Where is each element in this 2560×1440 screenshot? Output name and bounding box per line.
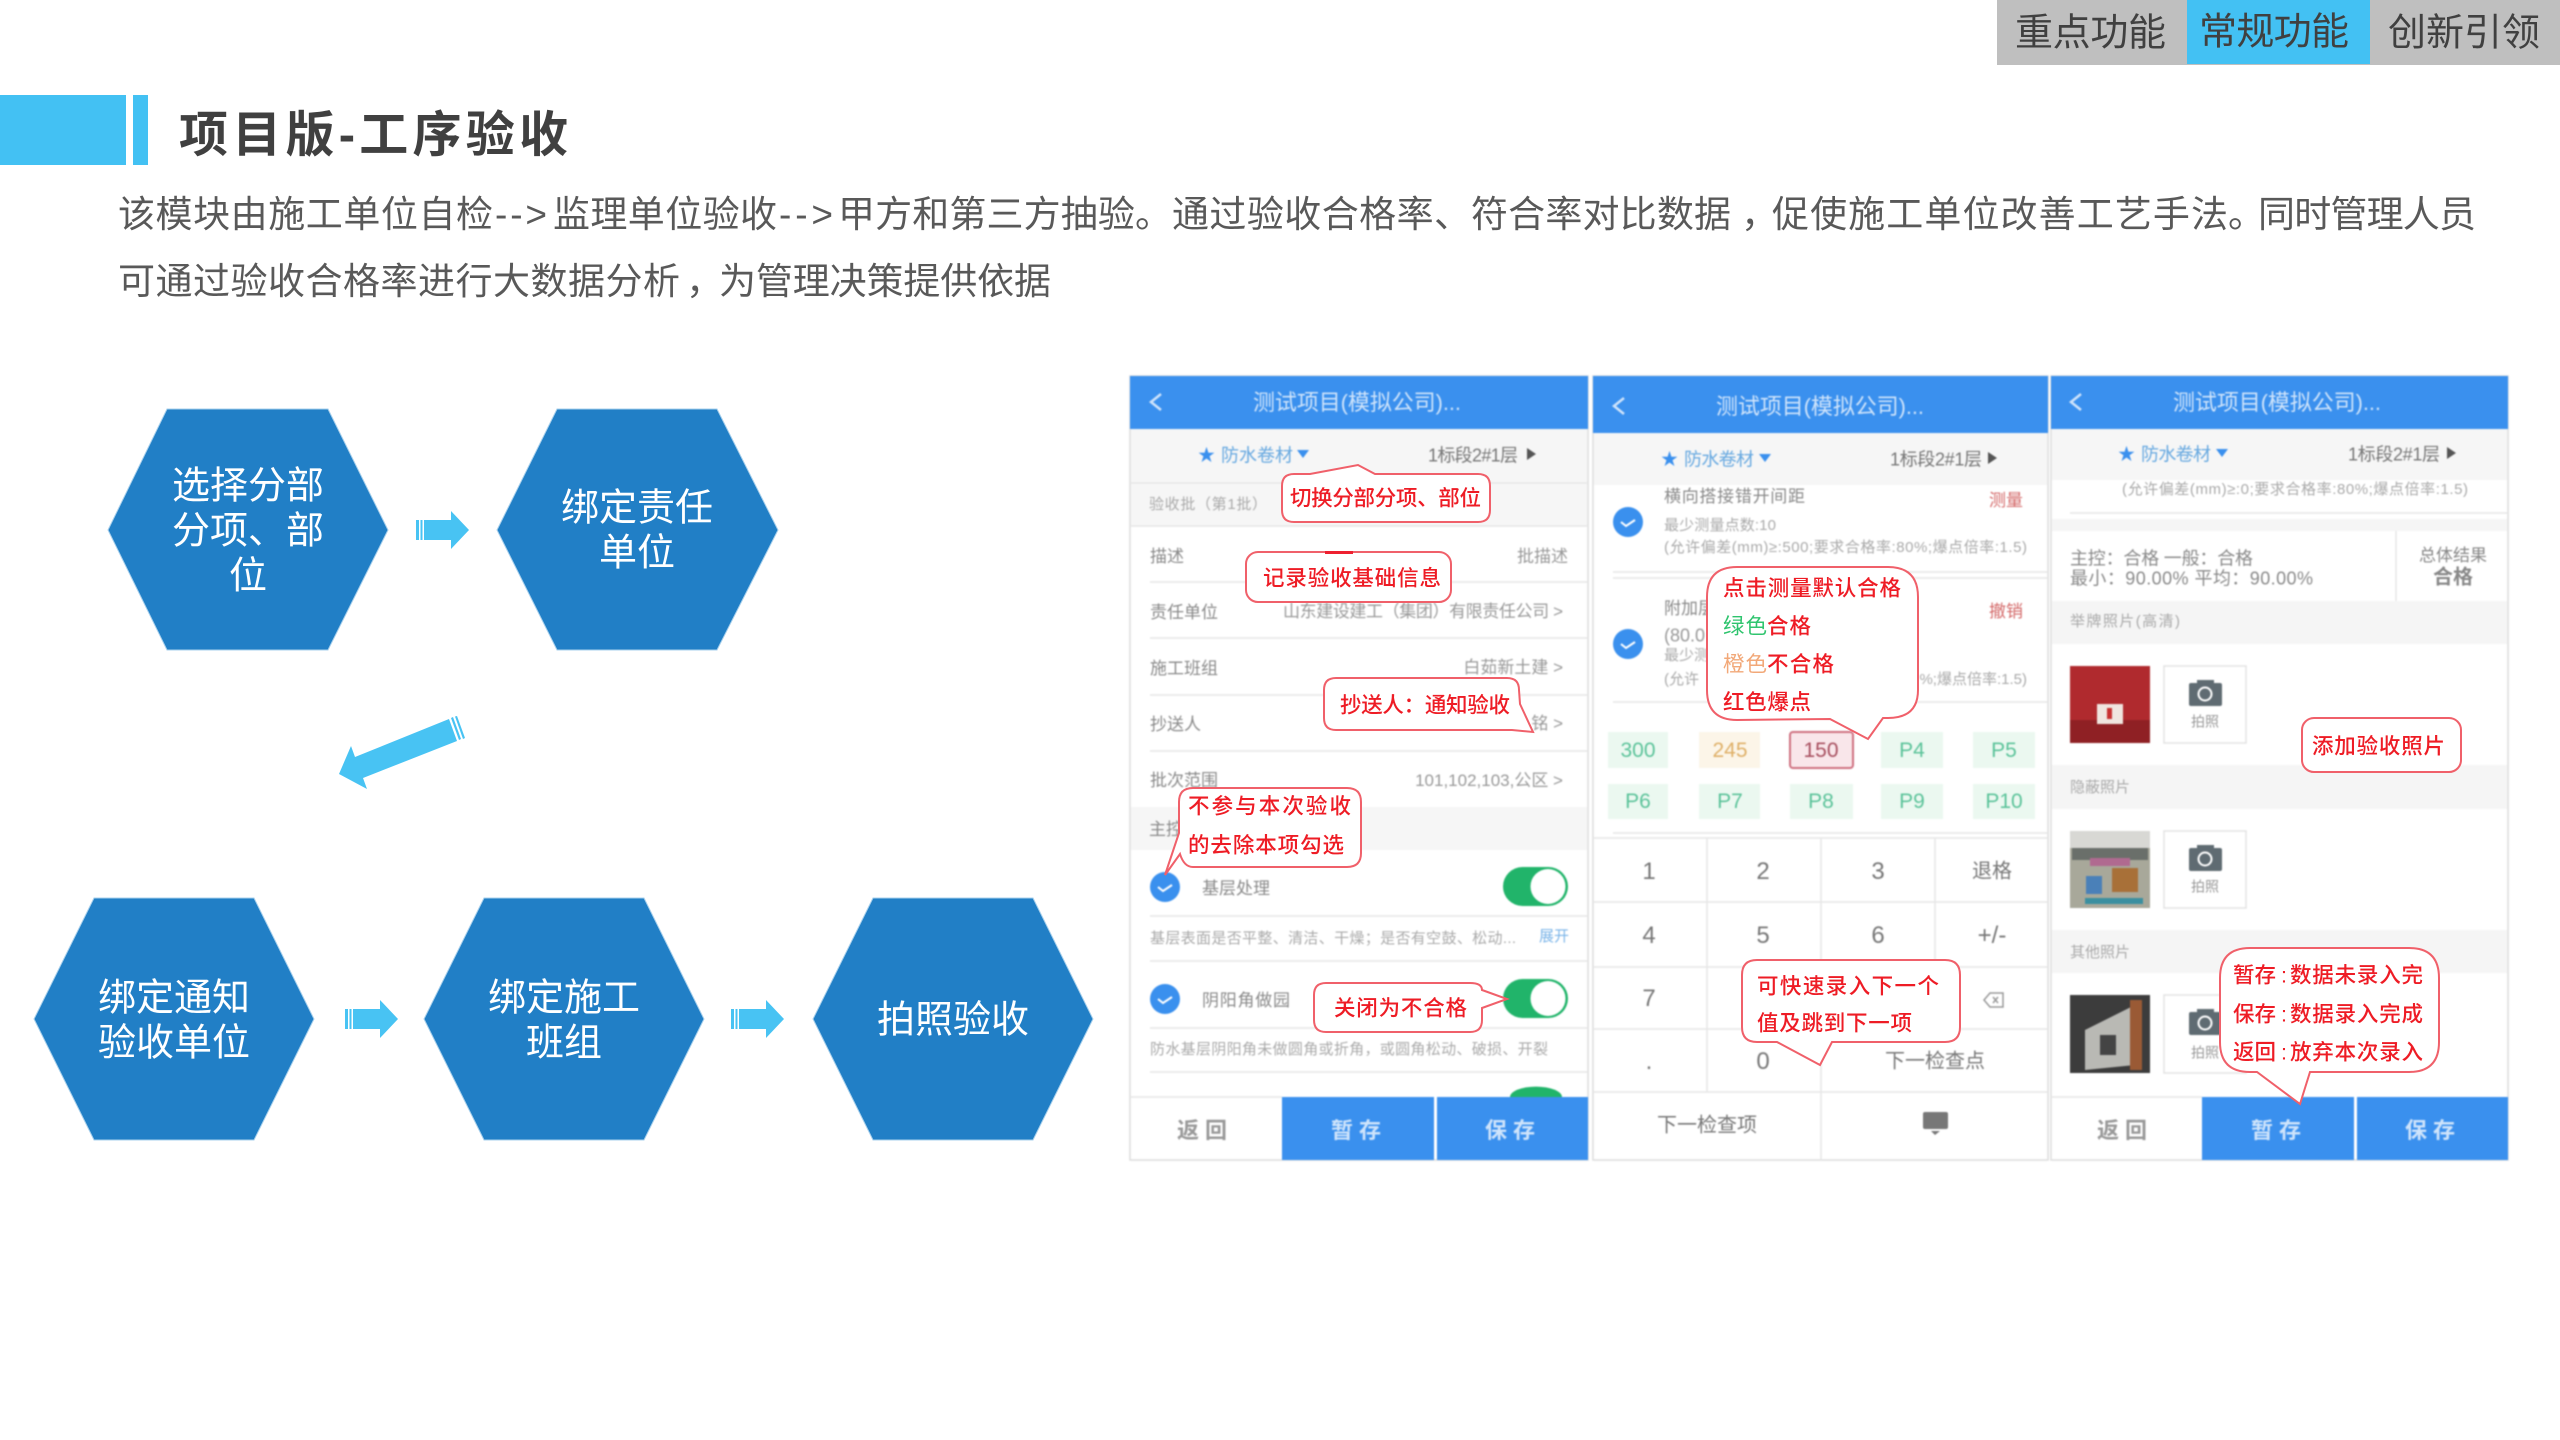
hexagon: step 5	[813, 898, 1093, 1140]
description text: 符合率对比数据	[1471, 194, 1731, 235]
callout: basic info: 记录验收基础信息	[1263, 566, 1441, 590]
callout: toggle off means fail	[1314, 983, 1507, 1032]
arrow: step 3 to 4	[345, 1000, 398, 1038]
description text: -->	[495, 194, 547, 235]
phone screen 1: inspection form: 测试项目(模拟公司)...	[1253, 390, 1461, 415]
phone screen 2: measurement input: (80.0	[1664, 626, 1705, 646]
description text: -->	[779, 194, 833, 235]
hexagon: step 4: 绑定施工	[488, 978, 640, 1020]
phone screen 2: measurement input: 最少测量点数:10	[1664, 517, 1776, 534]
phone screen 2: measurement input: (允许偏差(mm)≥:500;要求合格率:80%;爆点倍率:1.5)	[1664, 539, 2027, 556]
description text: ，	[1741, 194, 1778, 235]
phone screen 3: photos: 合格	[2433, 566, 2473, 588]
phone screen 2: measurement input: 附加层	[1664, 599, 1715, 618]
phone screen 1: inspection form: 山东建设建工（集团）有限责任公司 >	[1283, 602, 1563, 621]
description text: 可通过验收合格率进行大数据分析	[118, 261, 680, 302]
phone screen 2: measurement input: 撤销	[1989, 602, 2023, 621]
phone screen 1: inspection form: 批次范围	[1150, 771, 1218, 790]
phone screen 2: measurement input: 3	[1871, 858, 1885, 885]
callout: add photos	[2302, 718, 2461, 772]
hexagon: step 5: 拍照验收	[877, 1000, 1029, 1042]
phone screen 1: inspection form: 1标段2#1层	[1428, 446, 1518, 466]
phone screen 3: photos: 主控：合格 一般：合格	[2070, 548, 2253, 568]
title marker bars	[0, 95, 148, 165]
phone screen 2: measurement input: 2	[1756, 858, 1770, 885]
callout: quick entry	[1742, 960, 1960, 1065]
phone screen 3: photos: ★	[2118, 445, 2135, 464]
hexagon: step 1: 位	[229, 556, 267, 598]
callout: quick entry: 可快速录入下一个	[1757, 974, 1939, 998]
phone screen 3: photos: 暂 存	[2251, 1118, 2301, 1143]
hexagon: step 3	[34, 898, 314, 1140]
hexagon: step 3: 绑定通知	[98, 978, 250, 1020]
top navigation tabs	[1997, 0, 2560, 65]
callout: switch section	[1282, 465, 1490, 522]
phone screen 2: measurement input	[1593, 376, 2048, 1160]
phone screen 2: measurement input: P8	[1808, 790, 1834, 813]
phone screen 2: measurement input: P9	[1899, 790, 1925, 813]
callout: measurement colours: 不合格	[1767, 652, 1834, 676]
phone screen 1: inspection form	[1130, 376, 1588, 1160]
hexagon: step 3: 验收单位	[98, 1022, 250, 1064]
phone screen 2: measurement input: 300	[1620, 739, 1656, 762]
callout: measurement colours: 橙色	[1723, 652, 1767, 676]
top navigation tabs: 创新引领	[2388, 12, 2540, 54]
description text: 同时管理人员	[2258, 194, 2476, 235]
phone screen 2: measurement input: 测试项目(模拟公司)...	[1716, 394, 1924, 419]
top navigation tabs: 重点功能	[2015, 12, 2166, 54]
process flow	[34, 409, 1093, 1140]
callout: button meanings: 放弃本次录入	[2290, 1040, 2423, 1064]
hexagon: step 2: 绑定责任	[561, 488, 713, 530]
arrow: step 1 to 2	[416, 511, 469, 549]
phone screen 2: measurement input: P4	[1899, 739, 1925, 762]
phone screen 2: measurement input: P7	[1717, 790, 1743, 813]
callout: switch section: 切换分部分项、部位	[1290, 486, 1481, 510]
phone screen 2: measurement input: 6	[1871, 922, 1885, 949]
description text: 。	[2228, 194, 2265, 235]
phone screen 2: measurement input: 最少测	[1664, 647, 1709, 664]
phone screen 2: measurement input: 0	[1756, 1048, 1770, 1075]
phone screen 3: photos: 返 回	[2097, 1118, 2147, 1143]
phone screen 2: measurement input: (允许	[1664, 671, 1699, 688]
title: 项目版-工序验收	[179, 108, 568, 162]
callout: button meanings: 返回	[2233, 1040, 2276, 1064]
phone screen 2: measurement input: 1标段2#1层	[1890, 450, 1982, 470]
callout: button meanings: 数据录入完成	[2290, 1002, 2423, 1026]
phone screen 1: inspection form: 验收批（第1批）	[1149, 495, 1267, 513]
callout: button meanings: 数据未录入完	[2290, 964, 2423, 988]
phone screen 2: measurement input: 7	[1642, 985, 1656, 1012]
phone screen 1: inspection form: 描述	[1150, 547, 1184, 566]
phone screen 1: inspection form: 暂 存	[1331, 1118, 1381, 1143]
phone screen 1: inspection form: 返 回	[1177, 1118, 1227, 1143]
callout: uncheck item: 不参与本次验收	[1188, 794, 1351, 818]
callout: button meanings: 暂存	[2233, 964, 2276, 988]
phone screen 2: measurement input: 测量	[1989, 491, 2023, 510]
phone screen 3: photos: 其他照片	[2070, 944, 2130, 961]
hexagon: step 2: 单位	[599, 532, 675, 574]
phone screen 2: measurement input: P5	[1991, 739, 2017, 762]
phone screen 2: measurement input: 1	[1642, 858, 1656, 885]
hexagon: step 1: 选择分部	[172, 466, 324, 508]
phone screen 2: measurement input: %;爆点倍率:1.5)	[1919, 671, 2027, 688]
hexagon: step 1: 分项、部	[172, 510, 324, 552]
description text: 通过验收合格率、	[1172, 194, 1471, 235]
phone screen 2: measurement input: 横向搭接错开间距	[1664, 487, 1805, 506]
phone screen 3: photos: 防水卷材	[2141, 444, 2211, 464]
phone screen 2: measurement input: 下一检查项	[1657, 1114, 1757, 1136]
phone screen 1: inspection form: 保 存	[1485, 1118, 1535, 1143]
callout: button meanings: :	[2281, 1040, 2287, 1064]
phone screen 1: inspection form: 责任单位	[1150, 603, 1218, 622]
callout: button meanings: :	[2281, 1002, 2287, 1026]
phone screen 1: inspection form: 批描述	[1517, 547, 1568, 566]
phone screen 2: measurement input: 245	[1712, 739, 1748, 762]
phone screen 3: photos: 总体结果	[2419, 546, 2487, 565]
phone screen 2: measurement input: +/-	[1978, 922, 2006, 949]
callout: uncheck item: 的去除本项勾选	[1188, 834, 1344, 858]
phone screen 1: inspection form: 101,102,103,公区 >	[1415, 771, 1563, 790]
phone screen 1: inspection form: 基层表面是否平整、清洁、干燥；是否有空鼓、松动...	[1150, 930, 1516, 947]
callout: toggle off means fail: 关闭为不合格	[1334, 996, 1467, 1020]
phone screen 2: measurement input: ★	[1661, 450, 1678, 469]
callout: cc recipient: 抄送人：通知验收	[1340, 694, 1510, 718]
phone screen 2: measurement input: .	[1646, 1048, 1652, 1075]
callout: uncheck item	[1165, 788, 1361, 875]
description text	[118, 194, 2476, 302]
phone screen 3: photos: 测试项目(模拟公司)...	[2173, 390, 2381, 415]
phone screen 1: inspection form: 阴阳角做园	[1202, 991, 1290, 1010]
hexagon: step 2	[497, 409, 778, 650]
hexagon: step 1	[108, 409, 388, 650]
hexagon: step 4: 班组	[526, 1022, 602, 1064]
phone screen 1: inspection form: 施工班组	[1150, 659, 1218, 678]
description text: ，	[686, 261, 723, 302]
phone screen 2: measurement input: 防水卷材	[1684, 450, 1754, 470]
phone screen 3: photos: 保 存	[2405, 1118, 2455, 1143]
phone screen 1: inspection form: ★	[1198, 446, 1215, 465]
phone screen 1: inspection form: 基层处理	[1202, 879, 1270, 898]
callout: measurement colours	[1707, 567, 1918, 739]
phone screen 3: photos: 举牌照片(高清)	[2070, 613, 2180, 630]
phone screen 3: photos: 隐蔽照片	[2070, 779, 2130, 796]
phone screen 3: photos: 拍照	[2191, 1044, 2219, 1060]
callout: measurement colours: 红色爆点	[1723, 690, 1811, 714]
phone screen 2: measurement input: P10	[1985, 790, 2023, 813]
callout: quick entry: 值及跳到下一项	[1757, 1012, 1912, 1036]
description text: 监理单位验收	[553, 194, 777, 235]
phone screen 2: measurement input: 下一检查点	[1885, 1050, 1985, 1072]
description text: 为管理决策提供依据	[719, 261, 1051, 302]
phone screen 1: inspection form: 防水基层阴阳角未做圆角或折角，或圆角松动、破损、开裂	[1150, 1041, 1548, 1058]
callout: basic info	[1246, 551, 1451, 602]
phone screen 3: photos: (允许偏差(mm)≥:0;要求合格率:80%;爆点倍率:1.5)	[2122, 481, 2468, 498]
phone screen 2: measurement input: P6	[1625, 790, 1651, 813]
callout: button meanings: 保存	[2233, 1002, 2276, 1026]
callout: button meanings	[2220, 948, 2439, 1104]
phone screen 3: photos: 拍照	[2191, 878, 2219, 894]
callout: add photos: 添加验收照片	[2312, 734, 2445, 758]
callout: cc recipient	[1324, 678, 1533, 732]
phone screen 3: photos	[2051, 376, 2508, 1160]
callout: measurement colours: 合格	[1767, 614, 1811, 638]
phone screen 1: inspection form: 抄送人	[1150, 715, 1201, 734]
phone screen 3: photos: 最小：90.00% 平均：90.00%	[2070, 568, 2313, 588]
top navigation tabs: 常规功能	[2199, 12, 2349, 54]
phone screen 3: photos: 1标段2#1层	[2348, 444, 2440, 464]
callout: measurement colours: 点击测量默认合格	[1723, 576, 1901, 600]
phone screen 1: inspection form: 防水卷材	[1221, 446, 1293, 466]
phone screen 2: measurement input: 5	[1756, 922, 1770, 949]
phone screen 2: measurement input: 150	[1803, 739, 1839, 762]
phone screen 3: photos: 拍照	[2191, 714, 2219, 730]
phone screen 1: inspection form: 主控	[1149, 820, 1183, 839]
description text: 促使施工单位改善工艺手法	[1772, 194, 2228, 235]
callout: measurement colours: 绿色	[1723, 614, 1767, 638]
phone screen 2: measurement input: 退格	[1972, 860, 2012, 882]
phone screen 1: inspection form: 展开	[1539, 928, 1569, 945]
description text: 甲方和第三方抽验。	[838, 194, 1172, 235]
phone screen 1: inspection form: 白茹新土建 >	[1463, 658, 1563, 677]
callout: button meanings: :	[2281, 964, 2287, 988]
description text: 该模块由施工单位自检	[118, 194, 493, 235]
arrow: diagonal down-left	[339, 716, 465, 789]
hexagon: step 4	[424, 898, 704, 1140]
arrow: step 4 to 5	[731, 1000, 784, 1038]
phone screen 2: measurement input: 4	[1642, 922, 1656, 949]
phone screen 1: inspection form: 铭 >	[1531, 714, 1563, 733]
